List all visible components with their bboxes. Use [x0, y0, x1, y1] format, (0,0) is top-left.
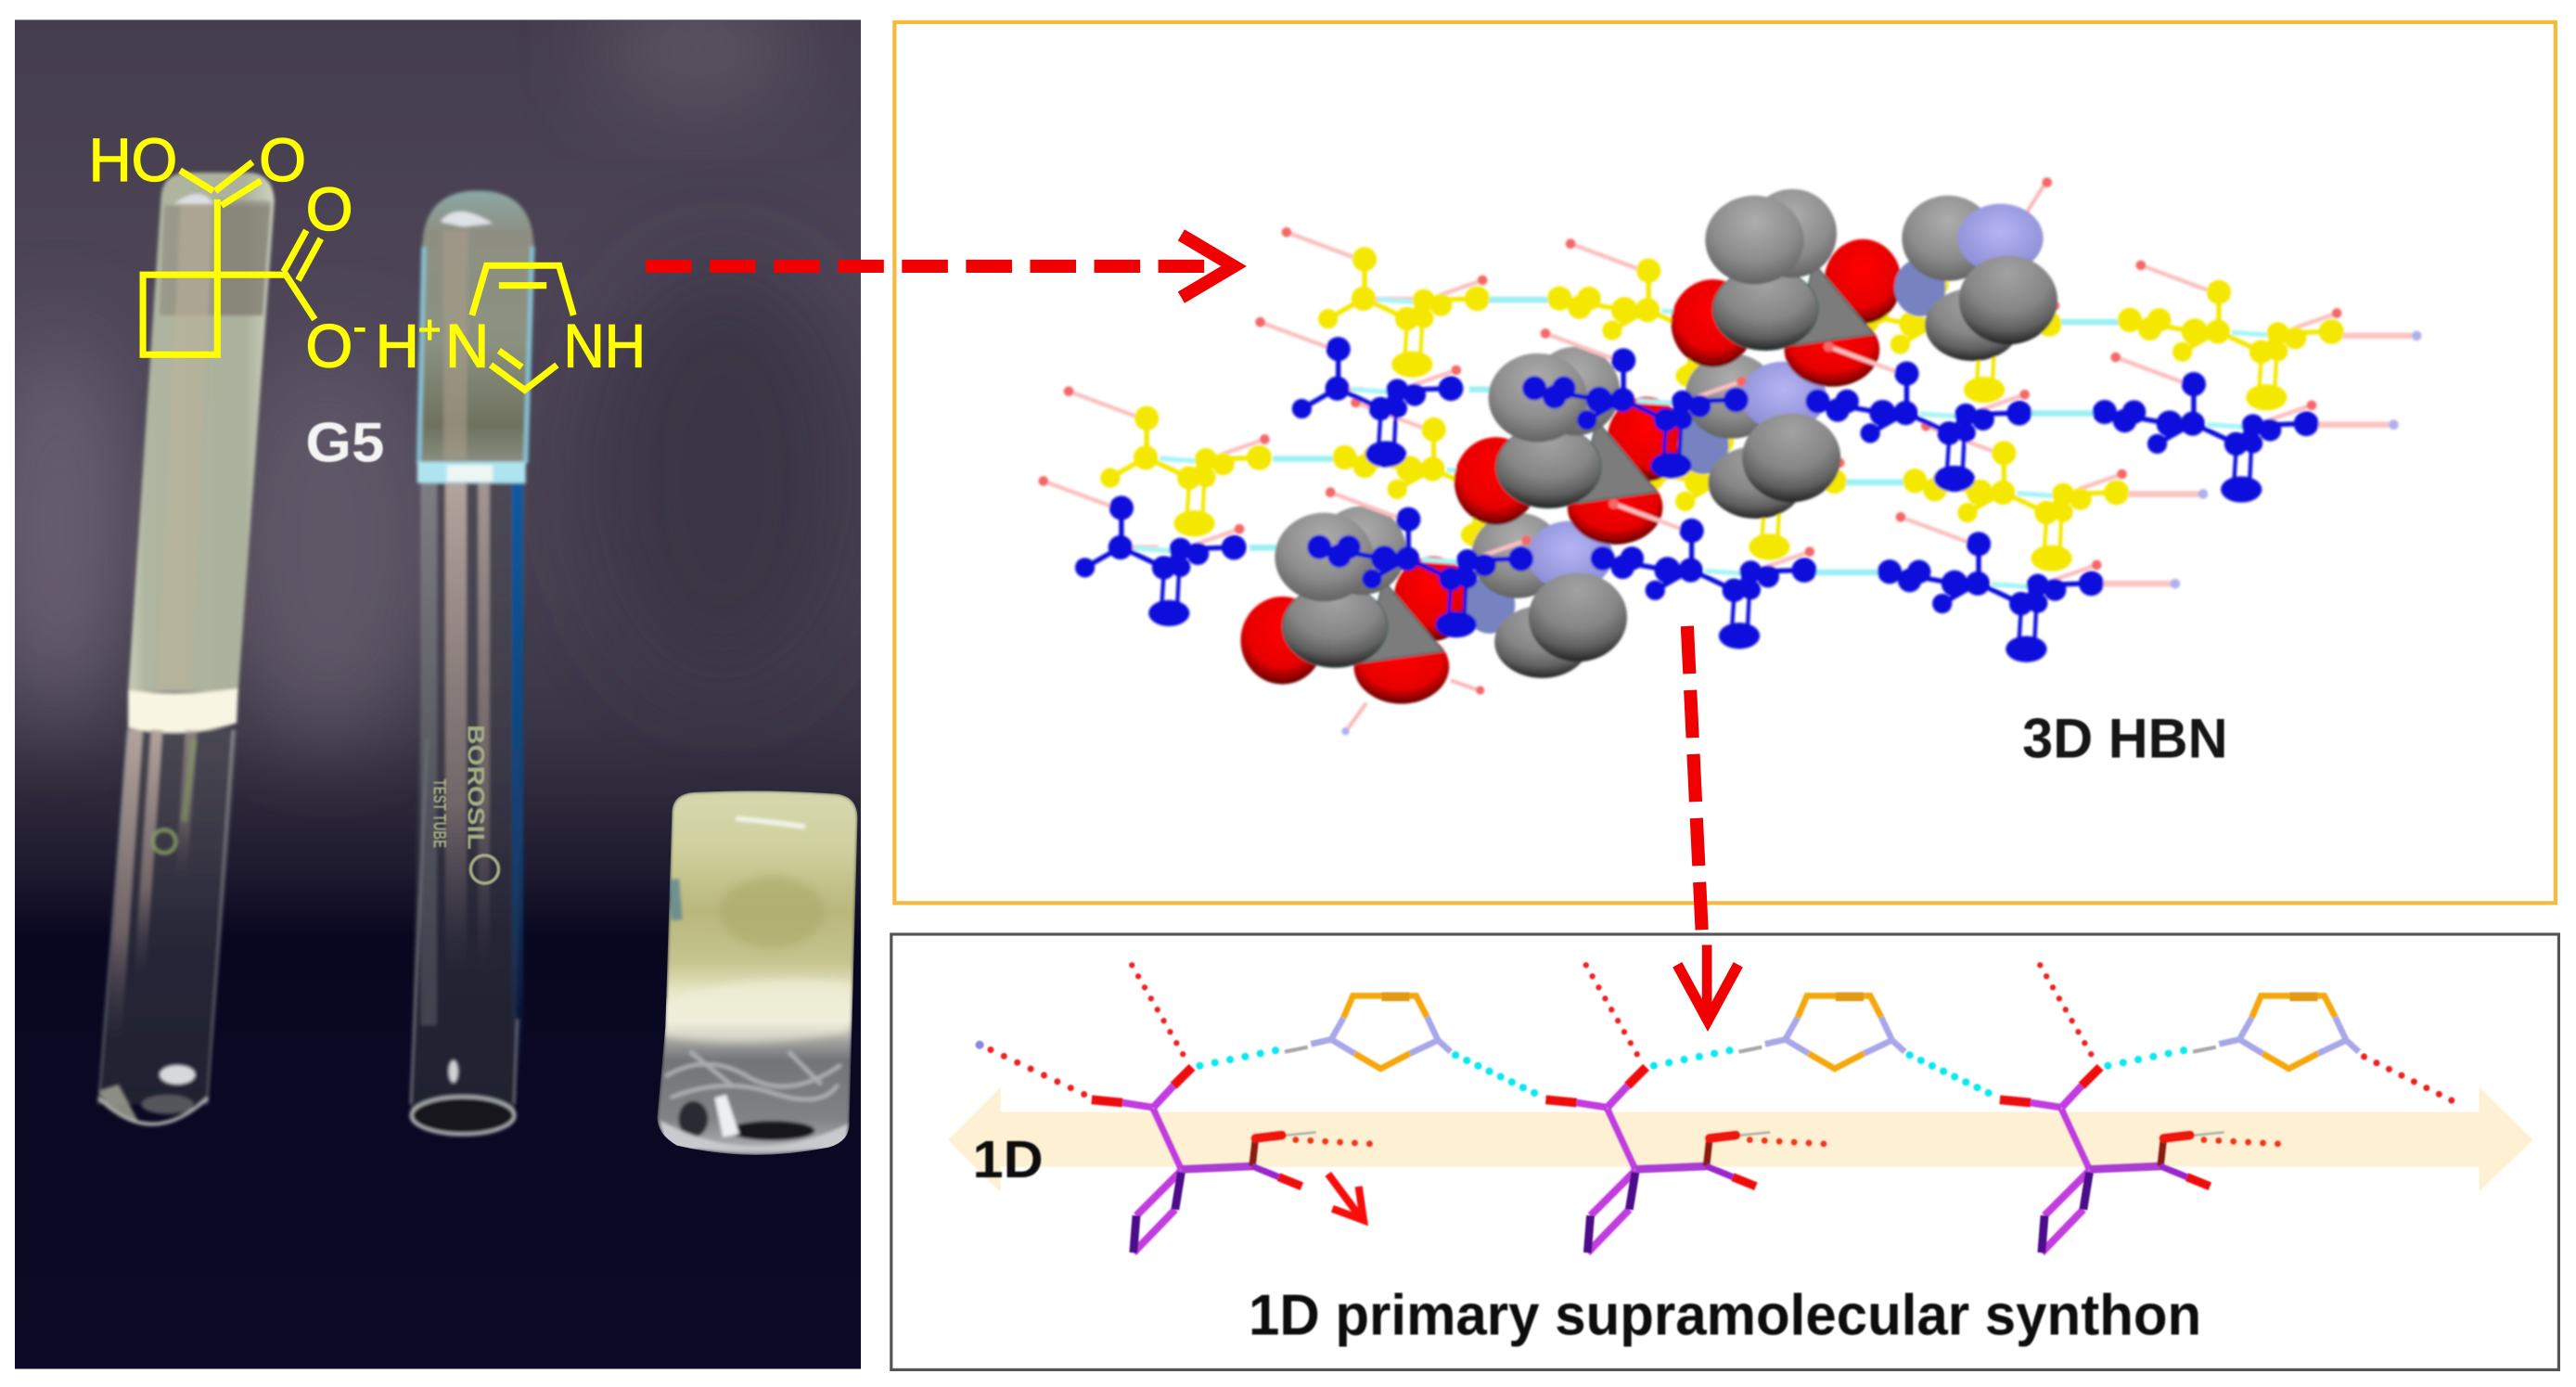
space-filling molecules: [1240, 189, 2057, 704]
chemical labels: NH: [563, 313, 646, 380]
chemical labels: [93, 137, 642, 368]
broad 1D arrow: [948, 1087, 2533, 1192]
tube printing: BOROSIL: [463, 725, 488, 850]
chemical labels: O: [306, 175, 353, 243]
chemical structure (yellow): [143, 162, 573, 390]
panel: photograph of gel tubes: [0, 0, 861, 1369]
middle test tube with gel: [411, 190, 534, 1135]
chemical labels: HO: [89, 126, 177, 194]
chemical labels: H: [376, 313, 419, 380]
intermolecular contacts: [975, 1041, 2459, 1104]
panel: 1D synthon frame: [891, 934, 2558, 1369]
chemical labels: O: [305, 313, 352, 380]
chart: 3D network molecular packing: [1038, 177, 2422, 735]
tube printing: [429, 725, 499, 883]
panel: 3D hydrogen-bonded network frame: [894, 22, 2556, 903]
yellow molecules: [1064, 227, 2344, 571]
chemical labels: N: [445, 313, 489, 380]
small red arrow: [1328, 1174, 1364, 1220]
chemical labels: +: [418, 309, 442, 353]
label: 3D HBN: 3D HBN: [2022, 707, 2228, 770]
arrow: 3D network to 1D synthon: [1677, 626, 1738, 1021]
label G5: G5: [305, 411, 384, 474]
tube printing: TEST TUBE: [429, 779, 450, 848]
blue molecules: [1038, 317, 2319, 662]
small vial with gel: [657, 790, 857, 1155]
label: 1D primary supramolecular synthon: 1D primary supramolecular synthon: [1249, 1283, 2201, 1347]
tail tips: [1341, 177, 2422, 735]
left test tube with gel: [98, 173, 275, 1124]
photo backdrop: [0, 0, 861, 1369]
chart: 1D synthon chain: [948, 965, 2533, 1252]
label: 1D: 1D: [972, 1131, 1044, 1189]
chemical labels: O: [259, 126, 306, 194]
arrow: gel to 3D network: [646, 235, 1234, 298]
hydrogen bond lines: [1122, 186, 2412, 731]
repeating units: [1092, 965, 2359, 1252]
chemical labels: -: [353, 306, 366, 350]
